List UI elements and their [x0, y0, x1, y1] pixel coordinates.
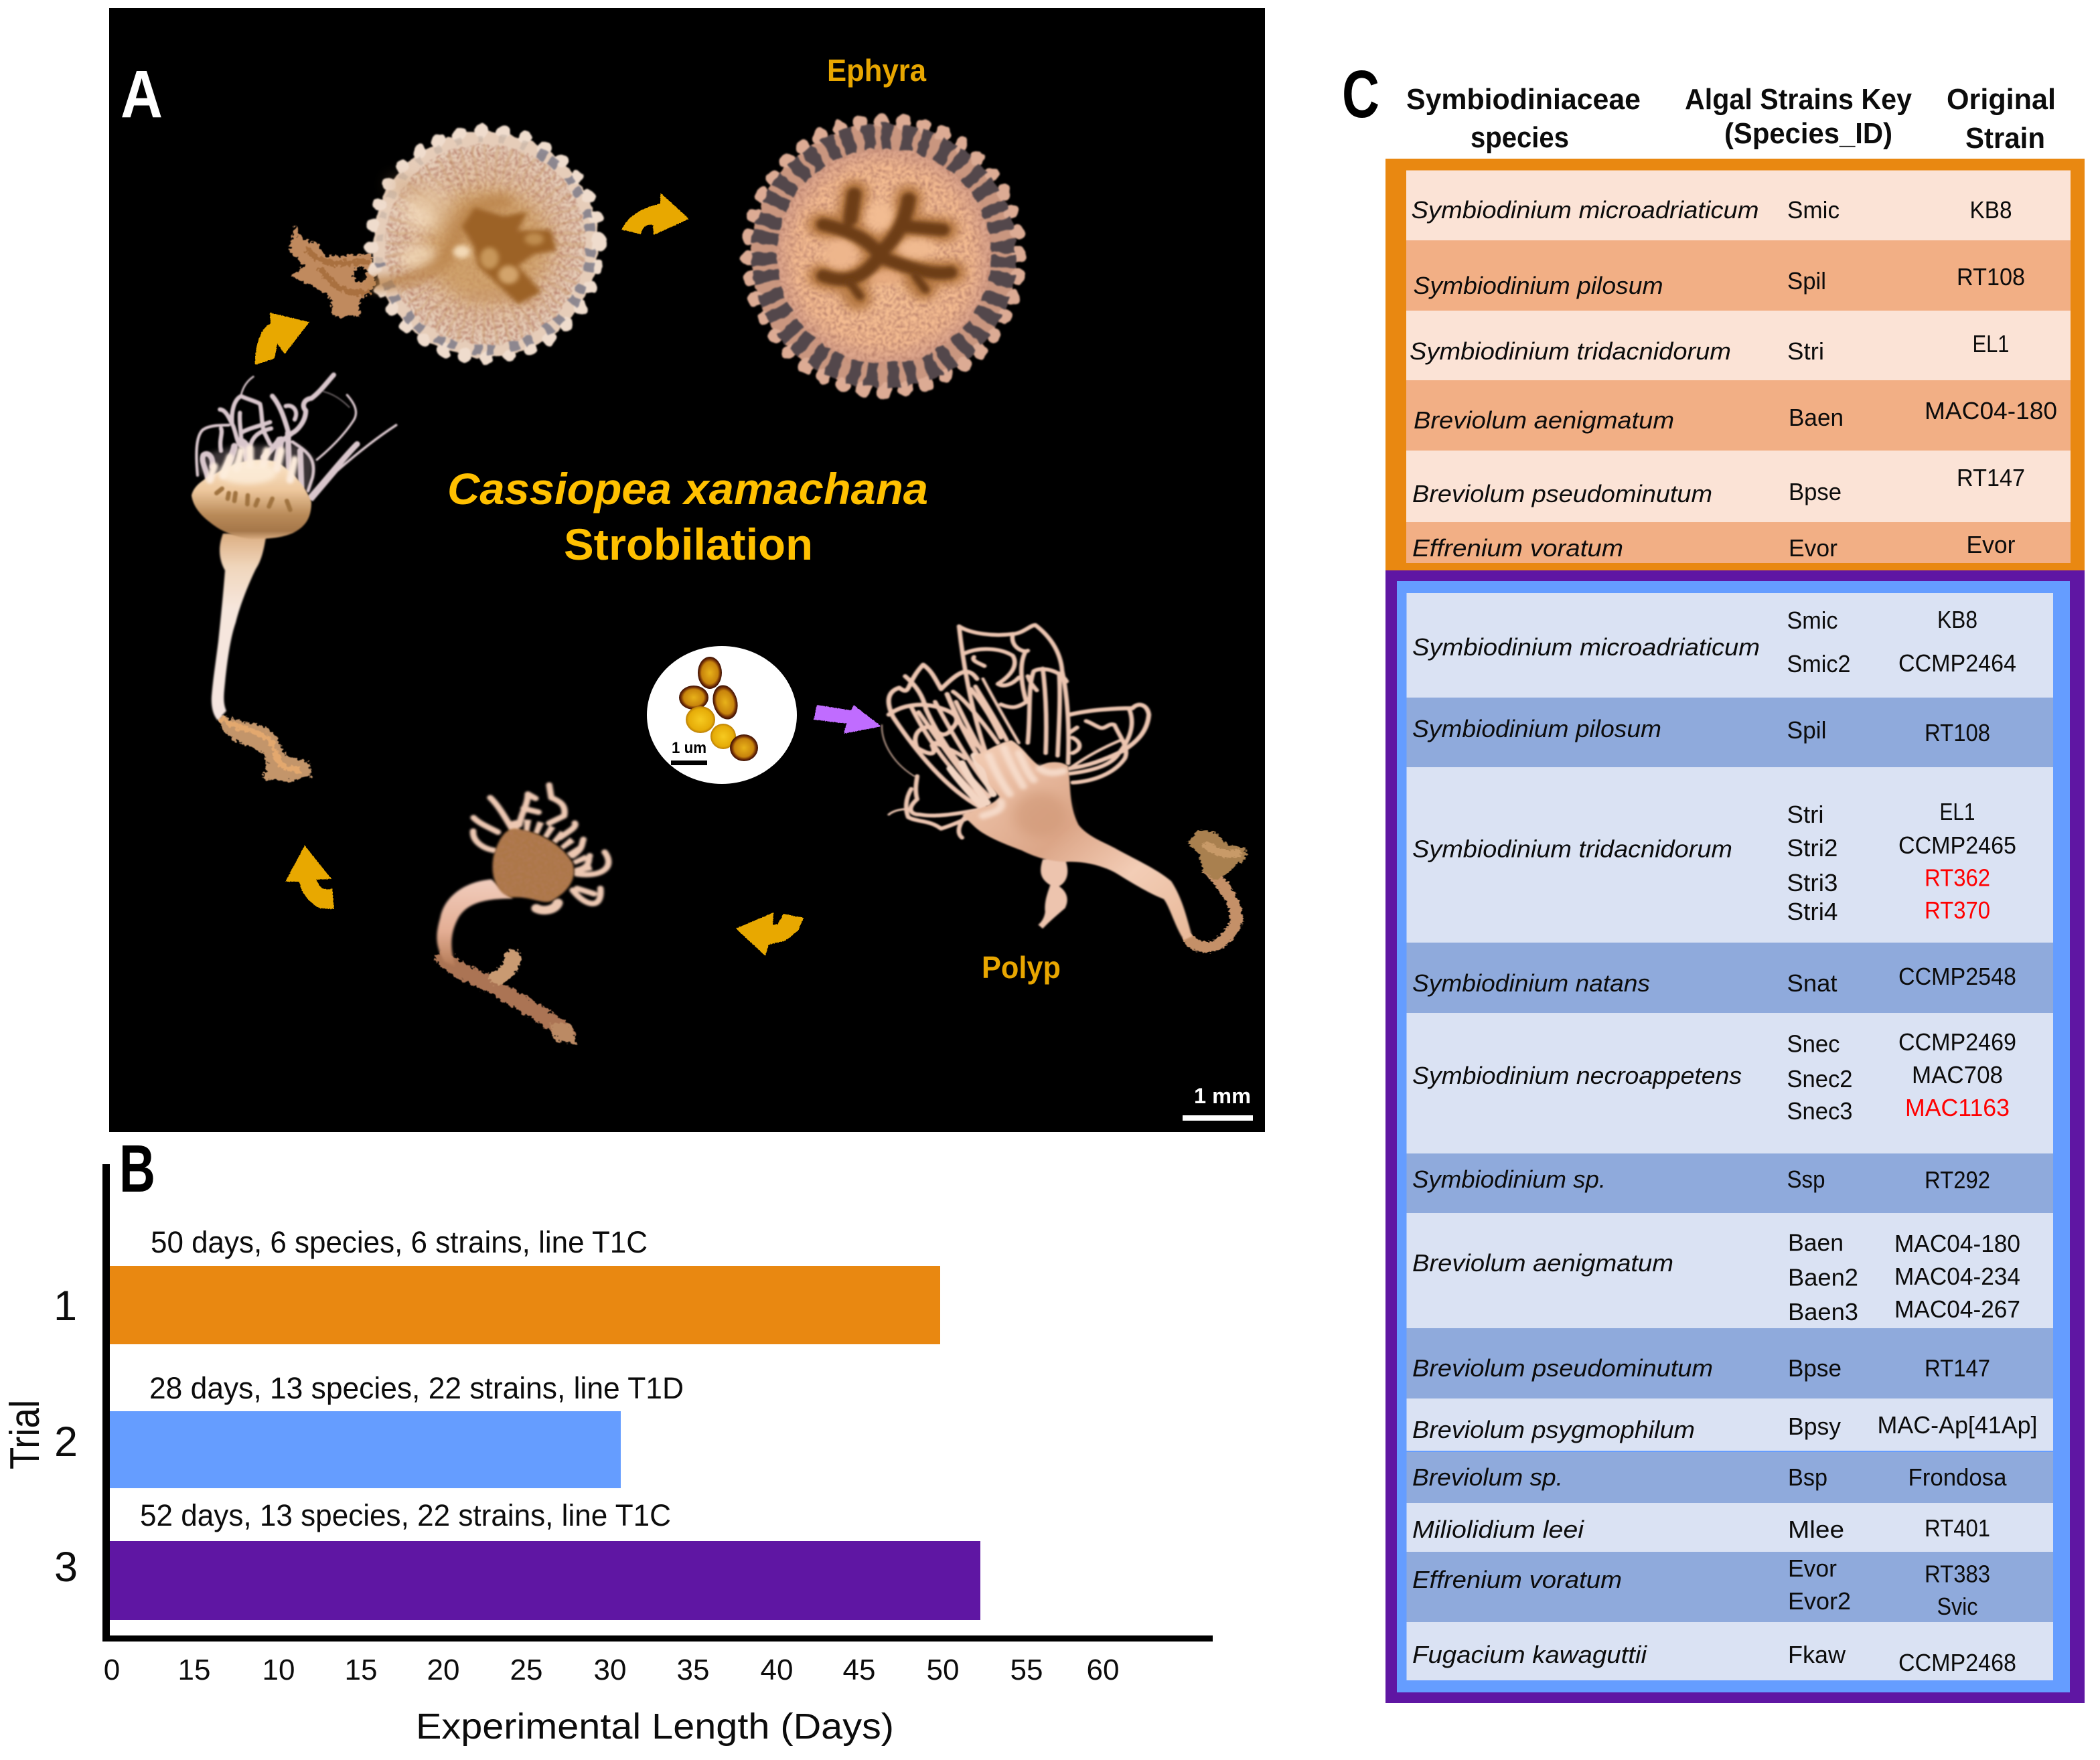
x axis tick labels: 20: [427, 1654, 459, 1686]
row: S. tridacnidorum trial 1: Stri: [1787, 337, 1824, 365]
scale bar: 1 mm: 1 mm: [1194, 1084, 1251, 1108]
icon: mature polyp with tentacles: [882, 625, 1246, 947]
row: S. necroappetens: MAC708: [1912, 1061, 2003, 1089]
row: Miliolidium leei: Miliolidium leei: [1412, 1516, 1584, 1543]
row: B. aenigmatum: Baen: [1788, 1229, 1844, 1256]
bar: trial 3: [110, 1541, 980, 1620]
table: trials 2 and 3 (purple and blue): [1385, 570, 2085, 1703]
row: Fugacium kawaguttii: Fkaw: [1788, 1641, 1846, 1668]
x axis tick labels: 40: [761, 1654, 793, 1686]
icon: strobilating polyp: [192, 375, 396, 781]
row: B. pseudominutum trial 1: Breviolum pseudominutum: [1412, 480, 1712, 507]
row: B. aenigmatum: MAC04-267: [1894, 1295, 2020, 1323]
row: B. aenigmatum trial 1: Baen: [1789, 404, 1844, 431]
panel letter B: B: [119, 1131, 155, 1206]
row: E. voratum trial 1: Evor: [1966, 531, 2016, 558]
row: S. natans: Symbiodinium natans: [1412, 969, 1650, 997]
row: S. pilosum trial 1: Spil: [1787, 267, 1826, 295]
panel B: experimental length bar chart: [2, 1131, 1213, 1747]
row: S. necroappetens: Symbiodinium necroappetens: [1412, 1062, 1742, 1089]
y axis title: Trial: Trial: [2, 1400, 48, 1469]
row: B. psygmophilum: [1406, 1398, 2053, 1451]
column header: Symbiodiniaceae species: Symbiodiniaceae: [1406, 83, 1641, 116]
row: Symbiodinium sp.: Symbiodinium sp.: [1412, 1166, 1606, 1193]
row: E. voratum: RT383: [1925, 1560, 1990, 1588]
row: S. necroappetens: Snec3: [1787, 1097, 1852, 1125]
column header: Original Strain: Strain: [1965, 122, 2045, 155]
arrow: ephyra maturing: [621, 193, 689, 235]
row: B. pseudominutum trial 1: RT147: [1957, 464, 2025, 491]
row: B. psygmophilum: Bpsy: [1788, 1413, 1841, 1440]
x axis tick labels: 25: [510, 1654, 542, 1686]
row: S. tridacnidorum trial 1: Symbiodinium tridacnidorum: [1410, 337, 1731, 365]
row: S. microadriaticum: Symbiodinium microadriaticum: [1412, 633, 1760, 661]
row: S. microadriaticum: KB8: [1937, 606, 1977, 633]
row: Fugacium kawaguttii: CCMP2468: [1898, 1649, 2016, 1676]
bar: trial 2: [108, 1411, 621, 1488]
panel C: algal strains table: [1342, 57, 2085, 1703]
row: Breviolum sp.: Frondosa: [1908, 1463, 2007, 1491]
row: S. tridacnidorum: EL1: [1939, 798, 1975, 825]
row: S. tridacnidorum: Stri2: [1787, 834, 1837, 862]
column header: Original Strain: Original: [1947, 83, 2056, 116]
row: B. pseudominutum trial 1: [1406, 451, 2071, 522]
row: E. voratum: Svic: [1937, 1593, 1978, 1620]
row: B. aenigmatum: MAC04-180: [1894, 1230, 2020, 1257]
row: S. tridacnidorum trial 1: [1406, 311, 2071, 380]
row: S. natans: [1406, 943, 2053, 1013]
row: S. tridacnidorum trial 1: EL1: [1973, 330, 2009, 357]
row: B. aenigmatum: Baen2: [1788, 1264, 1858, 1291]
row: S. microadriaticum: Smic: [1787, 607, 1837, 634]
column header: Algal Strains Key: (Species_ID): [1724, 117, 1892, 150]
row: S. microadriaticum trial 1: KB8: [1970, 196, 2012, 224]
row: S. natans: CCMP2548: [1898, 963, 2016, 990]
row: E. voratum: [1406, 1552, 2053, 1622]
row: Fugacium kawaguttii: [1406, 1622, 2053, 1680]
row: B. aenigmatum: MAC04-234: [1894, 1263, 2020, 1290]
row: S. tridacnidorum: Symbiodinium tridacnidorum: [1412, 835, 1732, 862]
row: B. psygmophilum: MAC-Ap[41Ap]: [1878, 1411, 2037, 1439]
row: B. psygmophilum: Breviolum psygmophilum: [1412, 1416, 1695, 1443]
row: Miliolidium leei: RT401: [1925, 1514, 1990, 1542]
row: S. necroappetens: [1406, 1013, 2053, 1153]
row: S. necroappetens: Snec: [1787, 1030, 1840, 1058]
y axis tick labels: 1: [54, 1283, 77, 1330]
x axis tick labels: 15: [178, 1654, 210, 1686]
title: Cassiopea xamachana Strobilation: [447, 464, 928, 569]
column header: Algal Strains Key: [1685, 83, 1912, 150]
row: S. natans: Snat: [1787, 969, 1837, 997]
x axis tick labels: 30: [594, 1654, 626, 1686]
row: E. voratum trial 1: Evor: [1789, 534, 1837, 562]
row: S. necroappetens: CCMP2469: [1898, 1028, 2016, 1056]
row: S. tridacnidorum: CCMP2465: [1898, 831, 2016, 859]
row: E. voratum: Effrenium voratum: [1412, 1566, 1622, 1593]
row: B. pseudominutum: RT147: [1925, 1354, 1990, 1382]
row: B. pseudominutum: Bpse: [1788, 1354, 1842, 1382]
icon: ephyra medusa: [749, 121, 1019, 391]
row: E. voratum: Evor: [1788, 1554, 1837, 1582]
row: B. aenigmatum trial 1: Breviolum aenigmatum: [1414, 406, 1674, 434]
axes: [102, 1164, 1213, 1642]
arrow: strobila to young ephyra: [255, 313, 309, 365]
x axis tick labels: 45: [843, 1654, 875, 1686]
x axis tick labels: 0: [104, 1654, 120, 1686]
column header: Original Strain: [1947, 83, 2056, 155]
x axis title: Experimental Length (Days): [416, 1706, 894, 1747]
row: B. aenigmatum trial 1: [1406, 380, 2071, 451]
x axis tick labels: 50: [927, 1654, 959, 1686]
row: E. voratum trial 1: [1406, 522, 2071, 563]
row: S. microadriaticum: CCMP2464: [1898, 649, 2016, 677]
row: Symbiodinium sp.: [1406, 1153, 2053, 1213]
row: S. tridacnidorum: Stri: [1787, 801, 1824, 828]
row: Miliolidium leei: Mlee: [1788, 1516, 1844, 1543]
x axis tick labels: 10: [262, 1654, 295, 1686]
bar: trial 1: [110, 1266, 940, 1344]
row: S. pilosum trial 1: RT108: [1957, 263, 2025, 291]
row: S. pilosum: [1406, 698, 2053, 767]
scale bar: 1 mm: [1183, 1084, 1253, 1121]
arrow: polyp stage to strobila: [285, 846, 334, 909]
row: B. aenigmatum trial 1: MAC04-180: [1925, 397, 2057, 424]
row: S. pilosum trial 1: Symbiodinium pilosum: [1413, 272, 1663, 299]
panel A: strobilation life cycle: [109, 8, 1265, 1132]
icon: algal cells inset: [647, 646, 797, 784]
bar label: trial 1: 50 days, 6 species, 6 strains, line T1C: [151, 1225, 648, 1259]
icon: young polyp with brown head: [437, 785, 609, 1045]
row: S. microadriaticum trial 1: [1406, 170, 2071, 241]
row: S. tridacnidorum: [1406, 767, 2053, 943]
arrow: algae infecting polyp: [814, 705, 881, 734]
row: Breviolum sp.: Bsp: [1788, 1463, 1827, 1491]
row: S. microadriaticum trial 1: Smic: [1787, 196, 1840, 224]
row: S. tridacnidorum: RT370: [1925, 896, 1990, 924]
arrow: mature polyp to young polyp: [736, 912, 804, 956]
row: S. microadriaticum: [1406, 593, 2053, 698]
row: S. tridacnidorum: Stri4: [1787, 898, 1837, 925]
row: B. pseudominutum trial 1: Bpse: [1789, 478, 1842, 505]
row: B. aenigmatum: [1406, 1213, 2053, 1328]
x axis tick labels: 55: [1010, 1654, 1043, 1686]
row: S. tridacnidorum: Stri3: [1787, 869, 1837, 896]
column header: Symbiodiniaceae species: species: [1471, 121, 1569, 154]
row: S. tridacnidorum: RT362: [1925, 864, 1990, 892]
title: Cassiopea xamachana Strobilation: Cassiopea xamachana: [447, 464, 928, 513]
y axis tick labels: 2: [54, 1419, 78, 1465]
column header: Symbiodiniaceae species: [1406, 83, 1641, 154]
row: E. voratum: Evor2: [1788, 1587, 1851, 1615]
row: S. microadriaticum: Smic2: [1787, 650, 1851, 677]
scale text: 1 um: 1 um: [672, 739, 706, 757]
row: S. necroappetens: MAC1163: [1905, 1094, 2010, 1121]
y axis tick labels: [54, 1283, 78, 1591]
row: Symbiodinium sp.: Ssp: [1787, 1166, 1825, 1193]
row: Symbiodinium sp.: RT292: [1925, 1166, 1990, 1194]
x axis tick labels: 35: [677, 1654, 709, 1686]
column header: Algal Strains Key: Algal Strains Key: [1685, 83, 1912, 116]
row: S. microadriaticum trial 1: Symbiodinium microadriaticum: [1412, 196, 1758, 224]
x axis tick labels: 60: [1087, 1654, 1119, 1686]
y axis tick labels: 3: [54, 1544, 78, 1591]
icon: young ephyra with stolon remnant: [289, 131, 599, 358]
row: B. pseudominutum: [1406, 1328, 2053, 1398]
row: E. voratum trial 1: Effrenium voratum: [1412, 534, 1623, 562]
label: Polyp: Polyp: [982, 950, 1061, 985]
x axis tick labels: [104, 1654, 1119, 1686]
row: B. pseudominutum: Breviolum pseudominutum: [1412, 1354, 1713, 1382]
row: B. aenigmatum: Breviolum aenigmatum: [1412, 1249, 1673, 1277]
title: Cassiopea xamachana Strobilation: Strobilation: [564, 519, 813, 569]
row: Breviolum sp.: Breviolum sp.: [1412, 1463, 1563, 1491]
row: S. pilosum: Symbiodinium pilosum: [1412, 715, 1661, 742]
row: S. necroappetens: Snec2: [1787, 1065, 1852, 1093]
panel letter A: A: [121, 57, 163, 132]
row: S. pilosum: Spil: [1787, 716, 1827, 744]
bar label: trial 2: 28 days, 13 species, 22 strains, line T1D: [149, 1371, 684, 1405]
row: S. pilosum: RT108: [1925, 719, 1990, 746]
row: Fugacium kawaguttii: Fugacium kawaguttii: [1412, 1641, 1647, 1668]
panel letter C: C: [1342, 57, 1379, 132]
bar label: trial 3: 52 days, 13 species, 22 strains, line T1C: [140, 1498, 671, 1532]
x axis tick labels: 15: [345, 1654, 377, 1686]
row: S. pilosum trial 1: [1406, 240, 2071, 311]
row: Breviolum sp.: [1406, 1452, 2053, 1503]
row: B. aenigmatum: Baen3: [1788, 1298, 1858, 1326]
table: trial 1 (orange): [1385, 159, 2085, 570]
row: Miliolidium leei: [1406, 1503, 2053, 1552]
label: Ephyra: Ephyra: [827, 53, 926, 88]
